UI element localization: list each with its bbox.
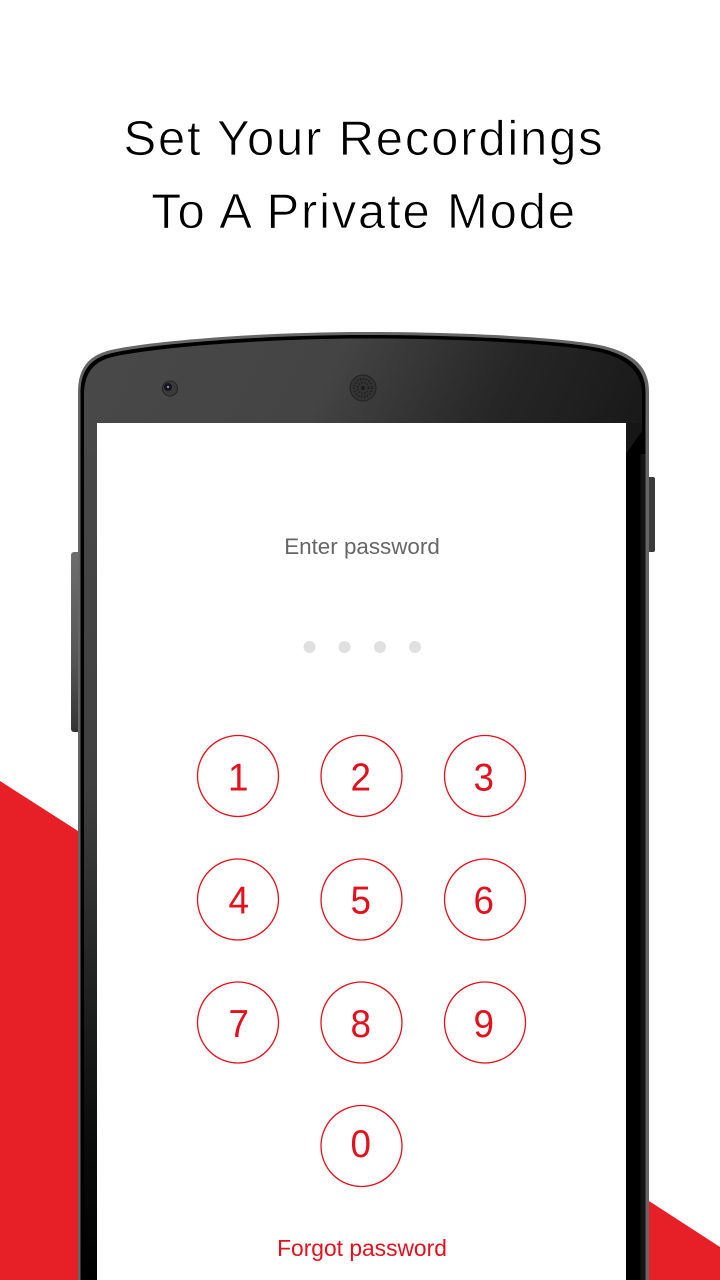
keypad — [198, 736, 526, 1186]
keypad digits: 1 — [228, 756, 248, 800]
forgot password link: Forgot password — [277, 1235, 447, 1261]
side button left — [71, 552, 81, 732]
phone outer rim — [78, 332, 649, 1280]
title — [124, 112, 604, 239]
keypad digits: 3 — [474, 756, 494, 800]
keypad digits: 4 — [228, 880, 249, 922]
keypad digits — [228, 756, 494, 1166]
keypad digits: 7 — [228, 1003, 249, 1046]
right bezel — [626, 423, 642, 1280]
front camera — [162, 381, 178, 396]
keypad digits: 9 — [474, 1003, 494, 1046]
keypad digits: 2 — [350, 756, 371, 800]
side button right — [646, 477, 655, 552]
phone — [71, 332, 655, 1280]
phone black edge — [80, 335, 646, 1280]
title: To A Private Mode — [151, 185, 577, 239]
keypad digits: 0 — [350, 1123, 371, 1166]
keypad digits: 5 — [350, 880, 371, 922]
speaker — [350, 375, 376, 401]
title: Set Your Recordings — [124, 112, 604, 166]
background triangle right — [649, 1201, 720, 1280]
background triangle left — [0, 781, 78, 1280]
password dots — [304, 641, 421, 653]
keypad digits: 6 — [474, 880, 494, 922]
left bezel and top bezel — [84, 338, 642, 1280]
keypad digits: 8 — [350, 1003, 371, 1046]
heading: enter password: Enter password — [284, 534, 440, 559]
screen — [97, 423, 626, 1280]
